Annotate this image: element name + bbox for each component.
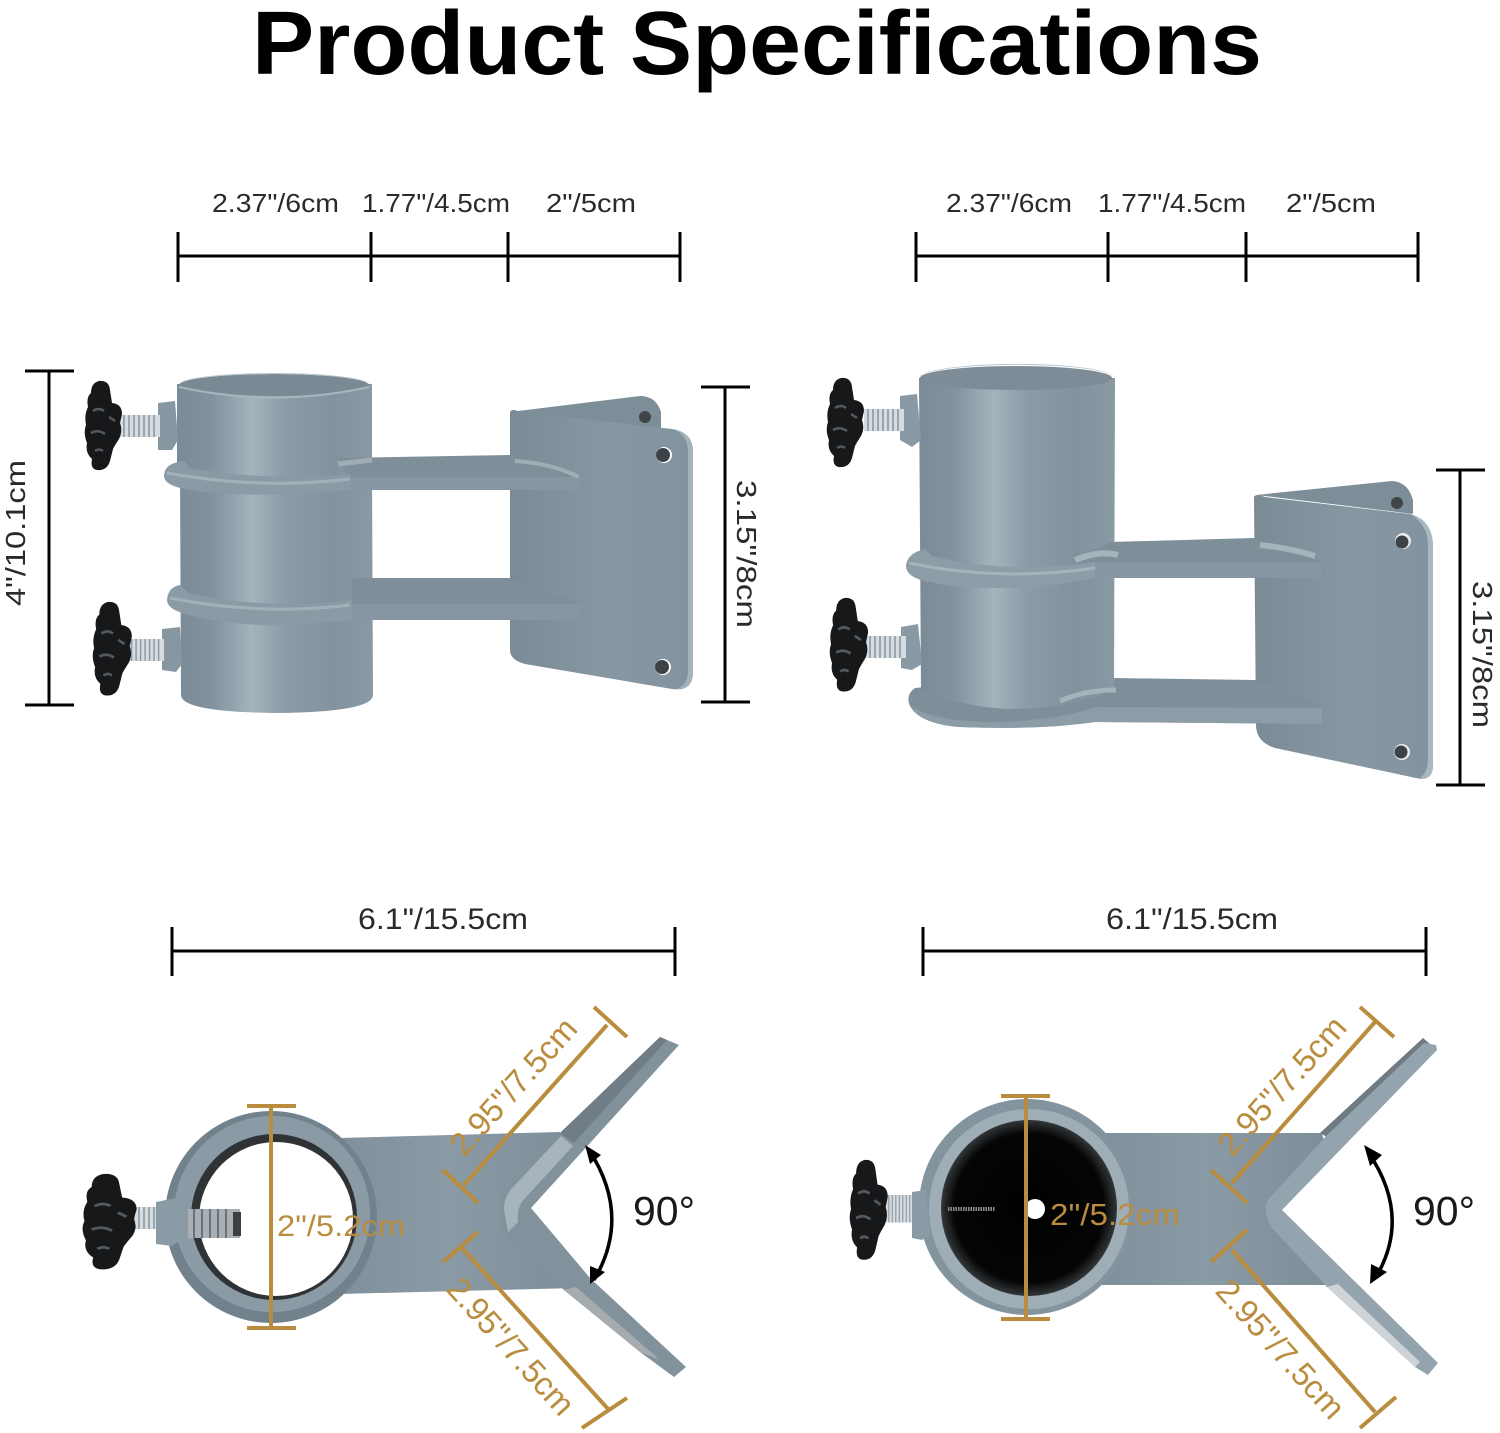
height dimension: 3.15 inch right: 3.15"/8cm bbox=[1467, 581, 1498, 728]
gold labels: 2.95"/7.5cm bbox=[440, 1270, 582, 1423]
angle arc bbox=[585, 1145, 612, 1284]
wall plate bbox=[1254, 481, 1433, 779]
panel: left bracket side view bbox=[85, 373, 693, 713]
gold dimensions bbox=[1001, 1007, 1396, 1428]
panel: top-left width dimensions bbox=[178, 188, 680, 282]
tube bbox=[919, 364, 1116, 709]
height dimension: 3.15 inch left: 3.15"/8cm bbox=[731, 480, 762, 628]
height dimension: 3.15 inch right bbox=[1436, 470, 1498, 785]
nuts, bolts and knobs bbox=[827, 378, 922, 692]
wall plate bbox=[510, 396, 693, 689]
V plate bbox=[500, 1037, 686, 1377]
gold labels: 2.95"/7.5cm bbox=[1210, 1009, 1354, 1163]
clamp ring bbox=[919, 1099, 1135, 1315]
panel: right bracket side view bbox=[827, 364, 1433, 779]
gold labels bbox=[1050, 1009, 1354, 1426]
V plate bbox=[1266, 1038, 1438, 1375]
panel: top-left width dimensions: 1.77"/4.5cm bbox=[362, 188, 510, 218]
angle label: 90° bbox=[633, 1188, 695, 1234]
panel: top-left width dimensions: 2.37"/6cm bbox=[212, 188, 339, 218]
width dimension: right 6.1 inch bbox=[923, 903, 1426, 976]
angle arc bbox=[1364, 1145, 1392, 1284]
gold labels bbox=[277, 1010, 584, 1423]
bolt and knob bbox=[83, 1174, 241, 1269]
tube bbox=[177, 373, 373, 713]
panel: top-left width dimensions: 2"/5cm bbox=[546, 188, 636, 218]
height dimension: 3.15 inch left bbox=[701, 387, 762, 702]
bolt and knob bbox=[850, 1160, 930, 1260]
upper arm and ring bbox=[906, 538, 1322, 588]
panel: top-right width dimensions bbox=[916, 188, 1418, 282]
upper arm and ring bbox=[164, 455, 580, 494]
lower arm and ring bbox=[167, 578, 580, 626]
panel: top-right width dimensions: 1.77"/4.5cm bbox=[1098, 188, 1246, 218]
lower arm and base ring bbox=[908, 678, 1322, 728]
gold dimensions bbox=[247, 1007, 627, 1428]
panel: top-right width dimensions: 2.37"/6cm bbox=[946, 188, 1072, 218]
gold labels: 2.95"/7.5cm bbox=[442, 1010, 584, 1163]
clamp ring bbox=[165, 1111, 377, 1323]
arm bbox=[340, 1132, 580, 1294]
arm bbox=[1100, 1133, 1332, 1285]
gold labels: 2"/5.2cm bbox=[277, 1210, 405, 1243]
width dimension: right 6.1 inch: 6.1"/15.5cm bbox=[1106, 903, 1278, 936]
angle label: 90° bbox=[1413, 1188, 1475, 1234]
width dimension: left 6.1 inch bbox=[172, 903, 675, 976]
panel: right bracket top view bbox=[850, 1007, 1475, 1428]
panel: top-right width dimensions: 2"/5cm bbox=[1286, 188, 1376, 218]
panel: left bracket top view bbox=[83, 1007, 695, 1428]
height dimension: 4 inch: 4"/10.1cm bbox=[0, 460, 31, 606]
width dimension: left 6.1 inch: 6.1"/15.5cm bbox=[358, 903, 528, 936]
nuts, bolts and knobs bbox=[85, 381, 182, 696]
height dimension: 4 inch bbox=[0, 371, 74, 705]
gold labels: 2.95"/7.5cm bbox=[1209, 1272, 1353, 1426]
gold labels: 2"/5.2cm bbox=[1050, 1197, 1180, 1232]
